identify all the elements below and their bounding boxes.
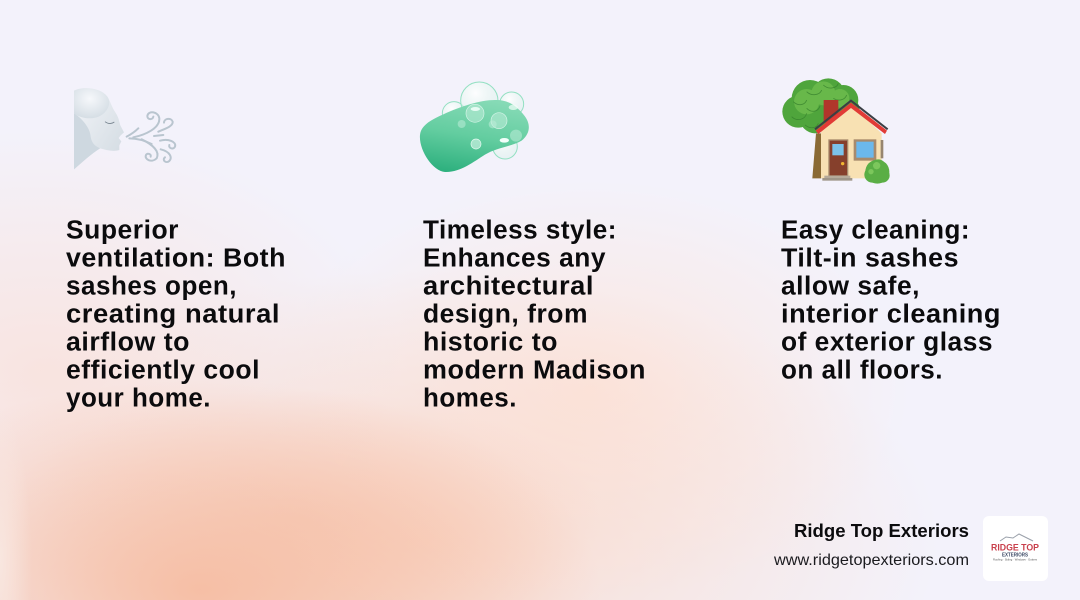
icon: green soap with bubbles xyxy=(420,82,529,172)
logo card: Roofing · Siding · Windows · Gutters xyxy=(993,558,1037,562)
text block: easy cleaning: allow safe, xyxy=(781,273,920,301)
text block: superior ventilation: efficiently cool xyxy=(66,357,260,385)
brand name: Ridge Top Exteriors xyxy=(794,521,969,541)
icon: face blowing wind xyxy=(74,88,175,169)
logo card xyxy=(983,516,1048,581)
text block: easy cleaning: of exterior glass xyxy=(781,329,993,357)
text block: easy cleaning: on all floors. xyxy=(781,357,943,385)
text block: superior ventilation: your home. xyxy=(66,385,211,413)
text block: superior ventilation: Superior xyxy=(66,217,179,245)
text block: superior ventilation: creating natural xyxy=(66,301,280,329)
text block: timeless style: homes. xyxy=(423,385,517,413)
text block: easy cleaning: Tilt-in sashes xyxy=(781,245,959,273)
text block: timeless style: modern Madison xyxy=(423,357,646,385)
text block: superior ventilation xyxy=(66,217,286,413)
text block: superior ventilation: sashes open, xyxy=(66,273,237,301)
text block: easy cleaning xyxy=(781,217,1001,385)
logo card: RIDGE TOP xyxy=(991,542,1040,554)
text block: timeless style xyxy=(423,217,646,413)
text block: timeless style: Enhances any xyxy=(423,245,606,273)
text block: timeless style: historic to xyxy=(423,329,558,357)
icon: house with tree xyxy=(782,78,890,184)
text block: timeless style: design, from xyxy=(423,301,588,329)
logo card: EXTERIORS xyxy=(1002,552,1029,558)
text block: easy cleaning: Easy cleaning: xyxy=(781,217,970,245)
text block: superior ventilation: ventilation: Both xyxy=(66,245,286,273)
website url: www.ridgetopexteriors.com xyxy=(773,552,969,569)
text block: superior ventilation: airflow to xyxy=(66,329,190,357)
text block: timeless style: architectural xyxy=(423,273,594,301)
text block: easy cleaning: interior cleaning xyxy=(781,301,1001,329)
text block: timeless style: Timeless style: xyxy=(423,217,617,245)
